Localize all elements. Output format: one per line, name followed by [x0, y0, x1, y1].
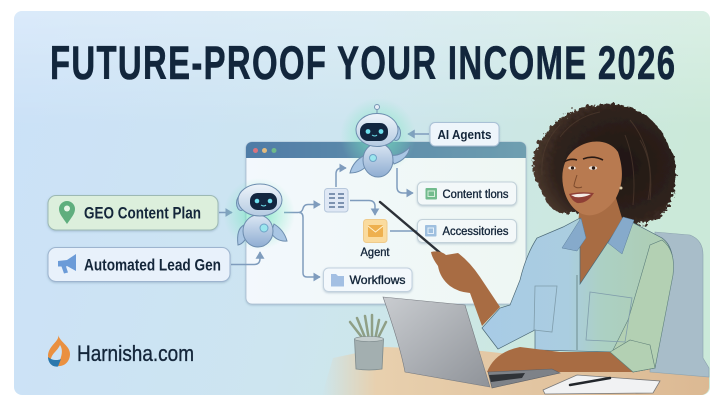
window control dots [253, 148, 276, 153]
title: FUTURE-PROOF YOUR INCOME 2026 [50, 36, 675, 89]
placket [576, 275, 578, 350]
window title bar [246, 142, 526, 158]
list item: Content tlons: Content tlons [442, 189, 509, 201]
pointer [380, 202, 445, 257]
earring [620, 186, 622, 190]
label: AI Agents [430, 122, 499, 146]
logo: Harnisha.com [48, 335, 194, 367]
icon: top robot [340, 98, 416, 177]
callout: Automated Lead Gen: Automated Lead Gen [84, 256, 221, 274]
laptop [383, 297, 560, 388]
notepad and pen [543, 375, 660, 394]
forearm and pointing hand [431, 251, 500, 326]
connector arrows [219, 134, 429, 277]
list item: Accessitories: Accessitories [442, 226, 509, 238]
desk [322, 347, 709, 395]
icon: envelope [364, 220, 387, 242]
node: Agent [360, 220, 390, 259]
panel: workflow window [246, 142, 526, 304]
eyes and brows [564, 157, 603, 170]
callout: GEO Content Plan [48, 196, 218, 230]
icon: green grid [426, 188, 437, 200]
hair strands [542, 112, 651, 205]
shirt [482, 218, 673, 372]
typing arm and hand [487, 347, 633, 373]
hair [533, 104, 677, 225]
list item: Content tlons [418, 182, 516, 205]
logo: Harnisha.com: Harnisha.com [77, 341, 194, 366]
shirt cuff [610, 340, 655, 372]
list item: Workflows: Workflows [350, 273, 406, 287]
shirt pockets [534, 286, 632, 342]
icon: left robot [223, 178, 295, 250]
icon: blue tile [425, 225, 436, 236]
icon: megaphone [58, 254, 76, 274]
icon: flame [48, 335, 70, 367]
list item: Workflows [324, 268, 412, 292]
collar [562, 217, 634, 254]
label: AI Agents: AI Agents [438, 127, 492, 142]
nose and smile [569, 175, 594, 203]
icon: pencil cup [350, 315, 386, 370]
right sleeve [612, 240, 674, 372]
callout: GEO Content Plan: GEO Content Plan [84, 204, 201, 222]
icon: map pin [59, 201, 75, 224]
node: Agent: Agent [360, 247, 390, 259]
callout: Automated Lead Gen [48, 248, 230, 282]
chair [650, 232, 709, 377]
icon: grid node [324, 188, 348, 212]
list item: Accessitories [418, 220, 516, 242]
icon: folder [331, 274, 344, 286]
person [380, 104, 709, 377]
face [562, 142, 622, 215]
neck and chest [577, 198, 622, 284]
